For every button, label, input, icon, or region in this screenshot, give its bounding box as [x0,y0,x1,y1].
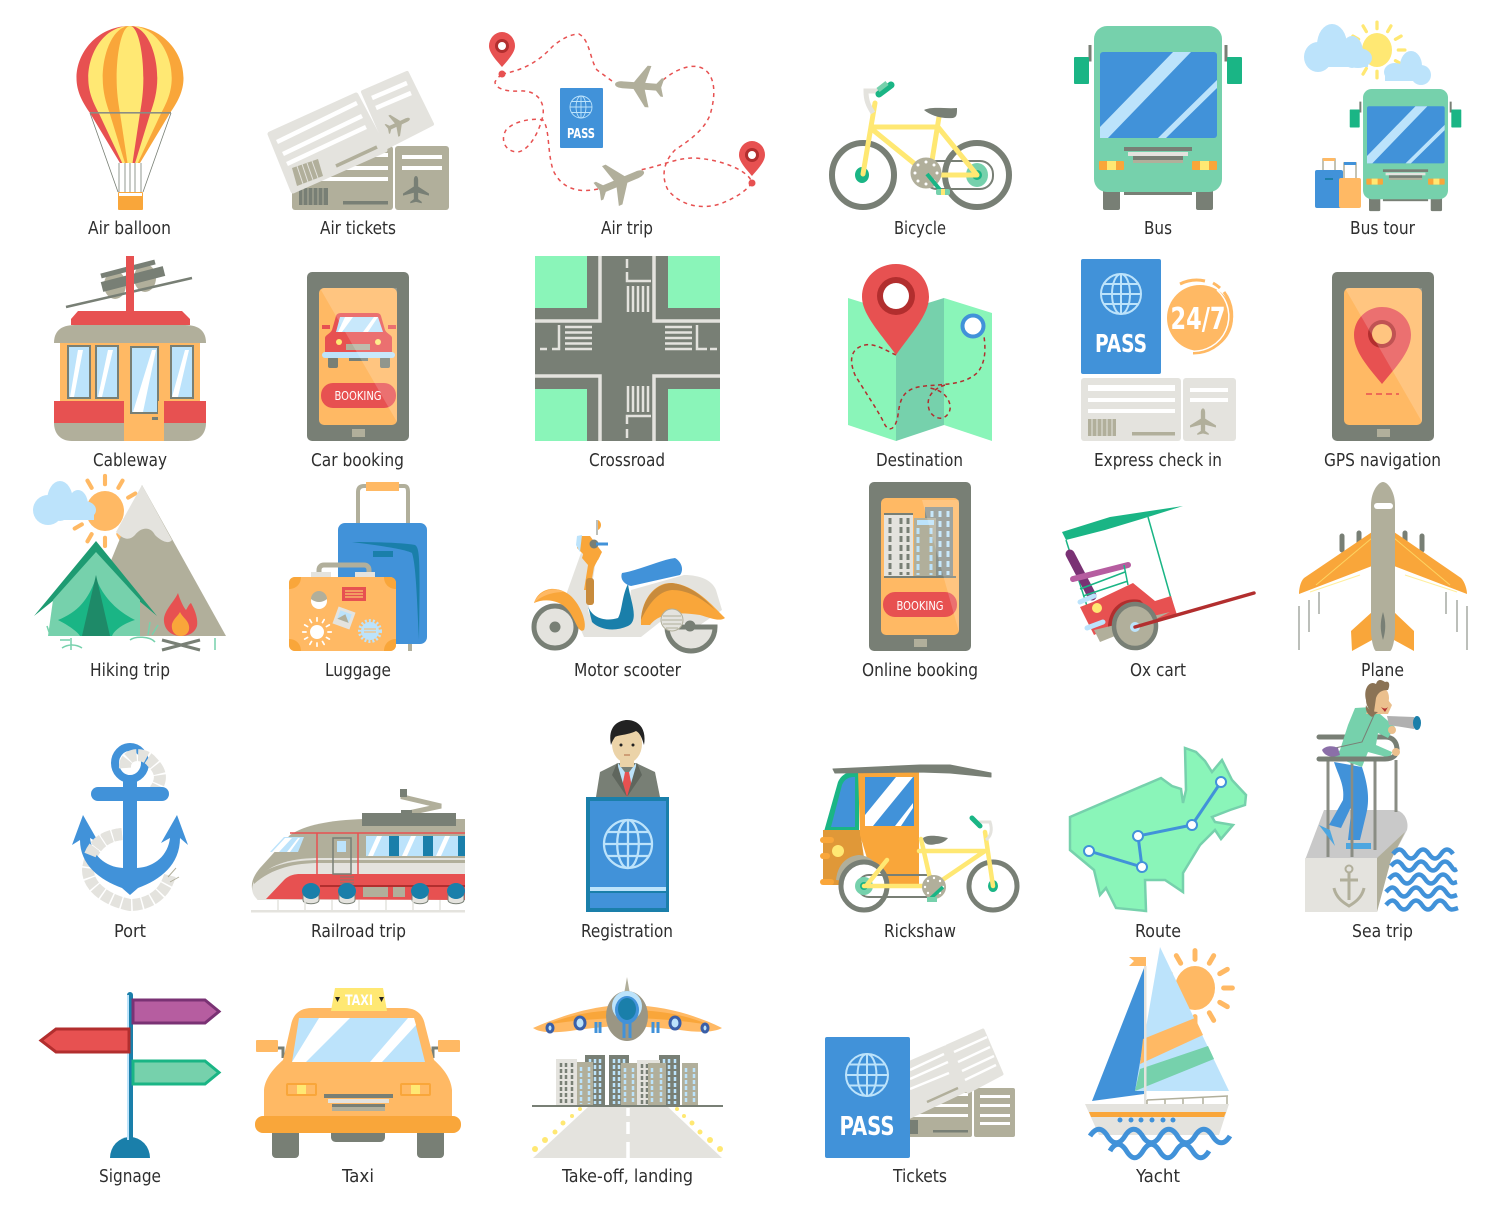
icon: sailboat with sun and waves [1085,947,1232,1158]
label: Railroad trip: Railroad trip [311,921,406,942]
panel: air tickets [270,73,449,239]
icon: phone with red car: BOOKING [334,389,382,403]
panel: air trip [489,32,765,239]
label: Bus tour: Bus tour [1350,218,1415,239]
icon: phone with red car [307,272,409,441]
icon: taxi front [255,988,461,1158]
label: Hiking trip: Hiking trip [90,660,170,681]
label: Air trip: Air trip [601,218,653,239]
icon: pair of tickets [270,73,449,210]
icon: phone with buildings: BOOKING [896,599,944,613]
icon: suitcases with stickers [289,482,427,651]
icon: cable car [54,256,206,441]
label: Air balloon: Air balloon [88,218,171,239]
label: Air tickets: Air tickets [320,218,396,239]
label: Cableway: Cableway [93,450,167,471]
icon: pedal rickshaw [820,765,1017,910]
icon: passport, 24/7 badge and ticket [1081,259,1236,441]
label: Taxi: Taxi [341,1166,374,1187]
panel: port [72,747,188,942]
icon: scooter [534,520,725,651]
label: Bus: Bus [1144,218,1172,239]
panel: luggage [289,482,427,681]
panel: yacht [1085,947,1232,1187]
panel: rickshaw [820,765,1017,942]
label: Express check in: Express check in [1094,450,1222,471]
panel: take-off, landing [532,977,723,1187]
panel: online booking [862,482,978,681]
panel: bus [1074,26,1242,239]
panel: ox cart [1062,506,1254,681]
icon: traveler with binoculars on pier [1305,680,1458,912]
label: Bicycle: Bicycle [894,218,946,239]
panel: cableway [54,256,206,471]
label: Registration: Registration [581,921,673,942]
icon: passport, 24/7 badge and ticket: 24/7 [1170,302,1226,337]
panel: crossroad [535,256,720,471]
icon: passport, 24/7 badge and ticket: PASS [1095,329,1147,358]
icon: phone with map pin [1332,272,1434,441]
panel: tickets [825,1030,1015,1187]
icon: hot air balloon [76,26,184,210]
label: Tickets: Tickets [892,1166,947,1187]
panel: car booking [307,272,409,471]
panel: destination [848,264,992,471]
label: Plane: Plane [1361,660,1404,681]
icon: plane above runway and city [532,977,723,1158]
label: Car booking: Car booking [311,450,404,471]
label: Yacht: Yacht [1135,1166,1180,1187]
panel: registration [581,720,673,942]
icon: dashed flight route with pins, planes and passport: PASS [567,127,595,142]
icon: map with connected stops [1070,748,1246,911]
label: Ox cart: Ox cart [1130,660,1186,681]
panel: GPS navigation [1324,272,1441,471]
label: Destination: Destination [876,450,963,471]
panel: motor scooter [534,520,725,681]
panel: taxi [255,988,461,1187]
label: Online booking: Online booking [862,660,978,681]
panel: route [1070,748,1246,942]
icon: phone with buildings [869,482,971,651]
icon: taxi front: TAXI [345,993,373,1009]
panel: air balloon [76,26,184,239]
icon: bus with sun, clouds and suitcases [1304,22,1461,211]
panel: plane [1299,482,1467,681]
icon: passport and tickets: PASS [840,1112,894,1142]
panel: hiking trip [33,476,226,681]
label: Crossroad: Crossroad [589,450,665,471]
panel: bus tour [1304,22,1461,239]
label: GPS navigation: GPS navigation [1324,450,1441,471]
icon: green bus front [1074,26,1242,210]
label: Take-off, landing: Take-off, landing [561,1166,693,1187]
label: Rickshaw: Rickshaw [884,921,956,942]
panel: sea trip [1305,680,1458,942]
panel: express check in [1081,259,1236,471]
icon: passport and tickets [825,1030,1015,1158]
label: Luggage: Luggage [325,660,391,681]
icon: yellow bicycle [832,83,1009,207]
panel: bicycle [832,83,1009,239]
label: Motor scooter: Motor scooter [574,660,681,681]
label: Route: Route [1135,921,1181,942]
icon: tent, mountain, sun and campfire [33,476,226,650]
panel: signage [41,992,219,1187]
icon: train [251,789,465,912]
label: Sea trip: Sea trip [1352,921,1413,942]
icon: cart with canopy [1062,506,1254,648]
icon: anchor with rope [72,747,188,905]
icon: direction signpost [41,992,219,1158]
panel: railroad trip [251,789,465,942]
icon: plane from above [1299,482,1467,651]
icon: dashed flight route with pins, planes and passport [489,32,765,212]
icon: folded map with pin [848,264,992,441]
icon: road intersection [535,256,720,441]
label: Port: Port [114,921,146,942]
icon: clerk at desk with globe [586,720,669,912]
label: Signage: Signage [99,1166,161,1187]
